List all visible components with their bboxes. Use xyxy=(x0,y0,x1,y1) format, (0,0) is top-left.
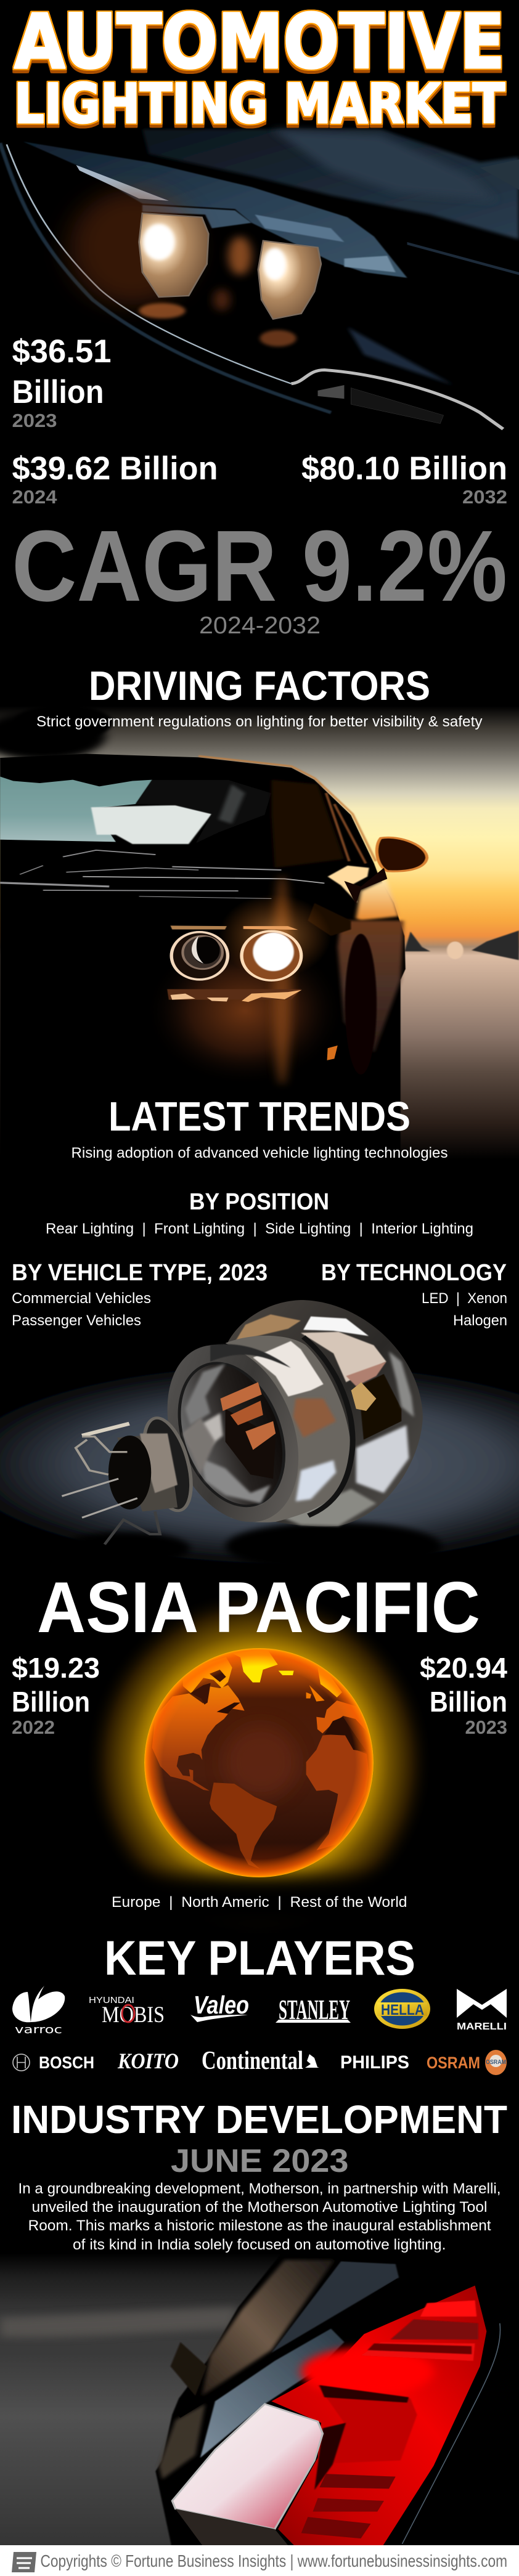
text: latest trends description: Rising adoption of advanced vehicle lighting technologies xyxy=(72,1145,447,1161)
footer xyxy=(0,2545,519,2576)
text: industry development paragraph: Room. This marks a historic milestone as the inaugural establishment xyxy=(28,2217,491,2234)
logo: stanley: STANLEY xyxy=(279,1994,350,2025)
logo: philips: PHILIPS xyxy=(340,2052,409,2073)
logo: hella xyxy=(374,1989,430,2029)
logo: osram: OSRAM xyxy=(486,2059,506,2066)
section: by technology: LED | Xenon xyxy=(422,1290,507,1307)
section: by position: Rear Lighting | Front Lighting | Side Lighting | Interior Lighting xyxy=(46,1221,473,1237)
stat: asia pacific 2023 xyxy=(420,1652,507,1738)
logo: stanley xyxy=(276,1994,351,2025)
section: by position: BY POSITION xyxy=(189,1189,329,1215)
stat: 2032 market value: 2032 xyxy=(462,486,507,508)
heading: key players: KEY PLAYERS xyxy=(104,1930,415,1985)
title xyxy=(14,0,505,136)
stat: asia pacific 2023: 2023 xyxy=(465,1717,507,1738)
stat: 2023 market value xyxy=(12,333,111,431)
heading: latest trends: LATEST TRENDS xyxy=(108,1094,411,1140)
stat: asia pacific 2023: $20.94 xyxy=(420,1652,507,1684)
logo: osram: OSRAM xyxy=(427,2054,480,2072)
image: black car at sunset xyxy=(0,705,519,1167)
heading: driving factors: DRIVING FACTORS xyxy=(89,663,430,709)
text: driving factor description: Strict government regulations on lighting for better visibility & safety xyxy=(36,713,482,730)
stat: 2032 market value: $80.10 Billion xyxy=(301,450,507,487)
section: by vehicle type xyxy=(12,1260,268,1329)
stat: 2023 market value: 2023 xyxy=(12,410,57,431)
image: car headlight closeup xyxy=(0,129,519,429)
stat: 2023 market value: $36.51 xyxy=(12,333,111,370)
section: by vehicle type: Passenger Vehicles xyxy=(12,1312,141,1329)
text: industry development paragraph: unveiled the inauguration of the Motherson Automotive Lighting Tool xyxy=(32,2199,488,2216)
stat: asia pacific 2022: Billion xyxy=(12,1686,90,1718)
icon: fortune business insights logo xyxy=(12,2552,36,2572)
logo: koito: KOITO xyxy=(117,2049,179,2073)
text: industry development paragraph: of its kind in India solely focused on automotive lighting. xyxy=(73,2237,446,2253)
logo: varroc xyxy=(12,1986,65,2036)
section: by vehicle type: Commercial Vehicles xyxy=(12,1290,151,1307)
logo: osram xyxy=(427,2050,507,2075)
image: halogen bulb xyxy=(0,1300,519,1571)
section: by technology xyxy=(321,1260,507,1329)
text: industry development paragraph: In a groundbreaking development, Motherson, in partnership with Marelli, xyxy=(18,2180,501,2197)
stat: asia pacific 2022: 2022 xyxy=(12,1717,55,1738)
logo: valeo: Valeo xyxy=(194,1991,249,2019)
logo: hyundai mobis: MOBIS xyxy=(102,2002,165,2028)
text: other regions: Europe | North Americ | Rest of the World xyxy=(112,1894,407,1911)
logo: marelli: MARELLI xyxy=(457,2021,507,2032)
logo: hyundai mobis xyxy=(89,1995,165,2028)
stat: 2032 market value xyxy=(301,450,507,508)
logo: bosch xyxy=(13,2053,94,2072)
stat: asia pacific 2022: $19.23 xyxy=(12,1652,100,1684)
image: red tail light xyxy=(0,2253,519,2550)
section: by position xyxy=(46,1189,473,1237)
image: glowing globe xyxy=(94,1598,423,1889)
stat: 2023 market value: Billion xyxy=(12,374,104,410)
stat: CAGR: 2024-2032 xyxy=(199,612,321,639)
heading: date: JUNE 2023 xyxy=(171,2143,349,2179)
section: by vehicle type: BY VEHICLE TYPE, 2023 xyxy=(12,1260,268,1286)
logo: hyundai mobis: HYUNDAI xyxy=(89,1995,134,2005)
logo: bosch: BOSCH xyxy=(39,2053,94,2072)
section: by technology: Halogen xyxy=(453,1312,507,1329)
section: by technology: BY TECHNOLOGY xyxy=(321,1260,507,1286)
logo: marelli xyxy=(457,1989,507,2032)
heading: industry development: INDUSTRY DEVELOPMENT xyxy=(11,2097,507,2142)
stat: 2024 market value: 2024 xyxy=(12,486,57,508)
logo: continental: Continental xyxy=(202,2047,303,2075)
text: industry development paragraph xyxy=(18,2180,501,2253)
logo: hella: HELLA xyxy=(381,2002,424,2018)
heading: asia pacific: ASIA PACIFIC xyxy=(37,1567,480,1648)
stat: 2024 market value xyxy=(12,450,218,508)
stat: asia pacific 2023: Billion xyxy=(430,1686,507,1718)
stat: 2024 market value: $39.62 Billion xyxy=(12,450,218,487)
stat: asia pacific 2022 xyxy=(12,1652,100,1738)
logo: varroc: varroc xyxy=(15,2023,62,2036)
